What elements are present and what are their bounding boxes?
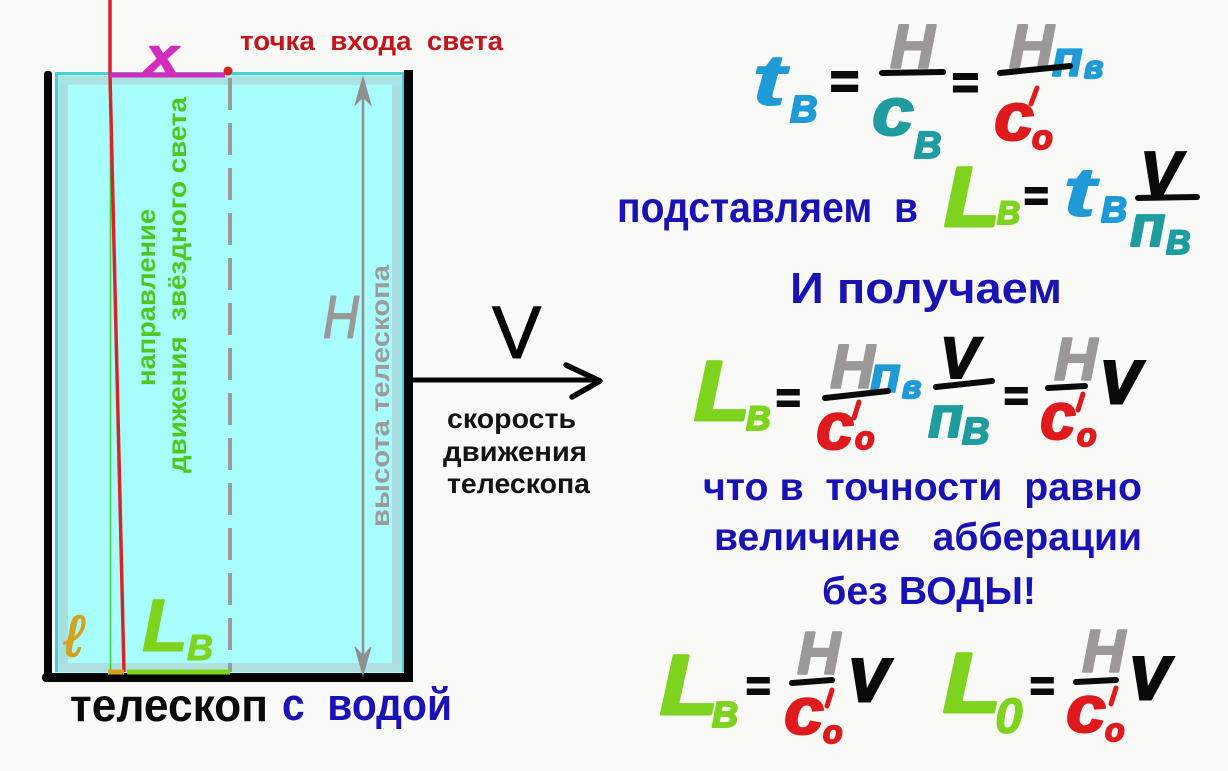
caption telescope with water: с водой	[282, 679, 452, 730]
water fill	[55, 72, 405, 673]
velocity caption	[443, 403, 590, 499]
label l: ℓ	[63, 604, 85, 669]
velocity arrow	[413, 365, 600, 397]
formula: L_B = t_B V / n_B: L	[944, 150, 1000, 244]
formula: L_B = t_B V / n_B	[944, 140, 1197, 262]
formula: L_B long: H	[1054, 326, 1099, 393]
formula: L_B final: H	[797, 620, 842, 687]
label L_B	[142, 584, 213, 668]
formula: L_B final: V	[848, 647, 893, 714]
formula: L_0 final: H	[1082, 618, 1127, 685]
caption telescope with water	[70, 679, 452, 731]
text: substitute into: подставляем в	[617, 184, 918, 232]
formula: t_B: В	[914, 125, 941, 167]
formula: t_B: c	[872, 74, 914, 150]
formula: t_B: t	[752, 41, 790, 121]
formula: t_B: В	[790, 89, 817, 131]
formula: L_B long: H	[830, 333, 876, 402]
label V: V	[492, 291, 542, 374]
vertical label telescope height: высота телескопа	[365, 264, 395, 527]
vertical label direction of star light: направление	[131, 209, 161, 386]
formula: t_B: в	[1084, 49, 1103, 85]
formula: t_B: c	[994, 79, 1034, 155]
formula: L_B long: В	[962, 411, 989, 453]
formula: L_0 final: L	[943, 636, 1001, 730]
label L_B: В	[187, 627, 213, 668]
formula: L_B long: V	[1100, 349, 1145, 416]
velocity caption: телескопа	[447, 468, 590, 499]
formula: L_0 final: V	[1129, 645, 1174, 712]
formula: L_B final: =	[746, 662, 771, 709]
formula: L_0 final	[943, 618, 1174, 748]
velocity caption: скорость	[447, 403, 576, 434]
vertical label direction of star light	[131, 96, 192, 473]
formula: L_B long: п	[870, 347, 901, 403]
label x: x	[142, 30, 181, 83]
conclusion text: что в точности равно	[703, 466, 1142, 509]
light entry point	[224, 66, 232, 76]
formula: L_B long: L	[694, 344, 750, 438]
label L_B: L	[142, 584, 188, 667]
formula: t_B: o	[1032, 119, 1053, 157]
caption telescope with water: телескоп	[70, 679, 268, 731]
formula: L_B long: в	[902, 369, 921, 405]
formula: L_0 final: =	[1030, 662, 1055, 709]
formula: L_B long: o	[855, 420, 875, 456]
formula: t_B: H	[890, 13, 936, 82]
formula: t_B	[752, 13, 1103, 167]
star light direction line	[110, 75, 112, 672]
formula: L_0 final: 0	[995, 688, 1023, 744]
formula: L_B long: В	[746, 400, 771, 438]
formula: L_B = t_B V / n_B: V	[1140, 140, 1186, 209]
formula: L_B = t_B V / n_B: =	[1024, 172, 1049, 219]
formula: L_B final: В	[712, 694, 738, 735]
formula: L_B = t_B V / n_B: t	[1063, 153, 1100, 231]
formula: L_B = t_B V / n_B: В	[997, 195, 1020, 231]
conclusion text: без ВОДЫ!	[822, 570, 1036, 613]
formula: t_B: =	[952, 56, 979, 108]
formula: L_B final: L	[660, 638, 718, 732]
formula: t_B: =	[830, 53, 859, 109]
formula: L_B long: п	[928, 385, 963, 450]
formula: L_B long: c	[816, 389, 854, 463]
velocity caption: движения	[443, 436, 587, 467]
height arrow H	[355, 77, 371, 675]
formula: L_B = t_B V / n_B: В	[1101, 189, 1127, 230]
conclusion text	[703, 466, 1142, 613]
telescope walls	[42, 70, 413, 682]
segment l	[108, 670, 124, 674]
formula: L_B long	[694, 326, 1145, 463]
vertical label direction of star light: движения звёздного света	[162, 96, 192, 473]
segment L_B	[127, 670, 230, 674]
formula: L_B = t_B V / n_B: п	[1130, 194, 1165, 259]
formula: L_B long: V	[940, 326, 983, 391]
conclusion text: величине абберации	[714, 516, 1142, 559]
formula: L_0 final: o	[1105, 712, 1125, 748]
offset x segment	[110, 72, 225, 78]
formula: t_B: п	[1052, 31, 1083, 87]
dashed vertical line	[228, 78, 232, 672]
formula: L_B final: o	[823, 714, 843, 750]
formula: L_B final	[660, 620, 893, 750]
text: and we get: И получаем	[790, 264, 1062, 313]
formula: L_B long: o	[1077, 417, 1097, 453]
formula: L_B = t_B V / n_B: В	[1166, 224, 1191, 262]
formula: t_B: H	[1009, 13, 1055, 82]
formula: L_B long: =	[776, 374, 801, 421]
formula: L_B long: =	[1004, 372, 1029, 419]
formula: L_B long: c	[1040, 379, 1076, 453]
label light entry point: точка входа света	[240, 26, 504, 56]
formula: L_0 final: c	[1066, 672, 1106, 746]
label H: H	[323, 284, 360, 351]
formula: L_B final: c	[784, 674, 824, 748]
refracted red ray	[110, 0, 124, 672]
telescope diagram	[42, 0, 413, 682]
